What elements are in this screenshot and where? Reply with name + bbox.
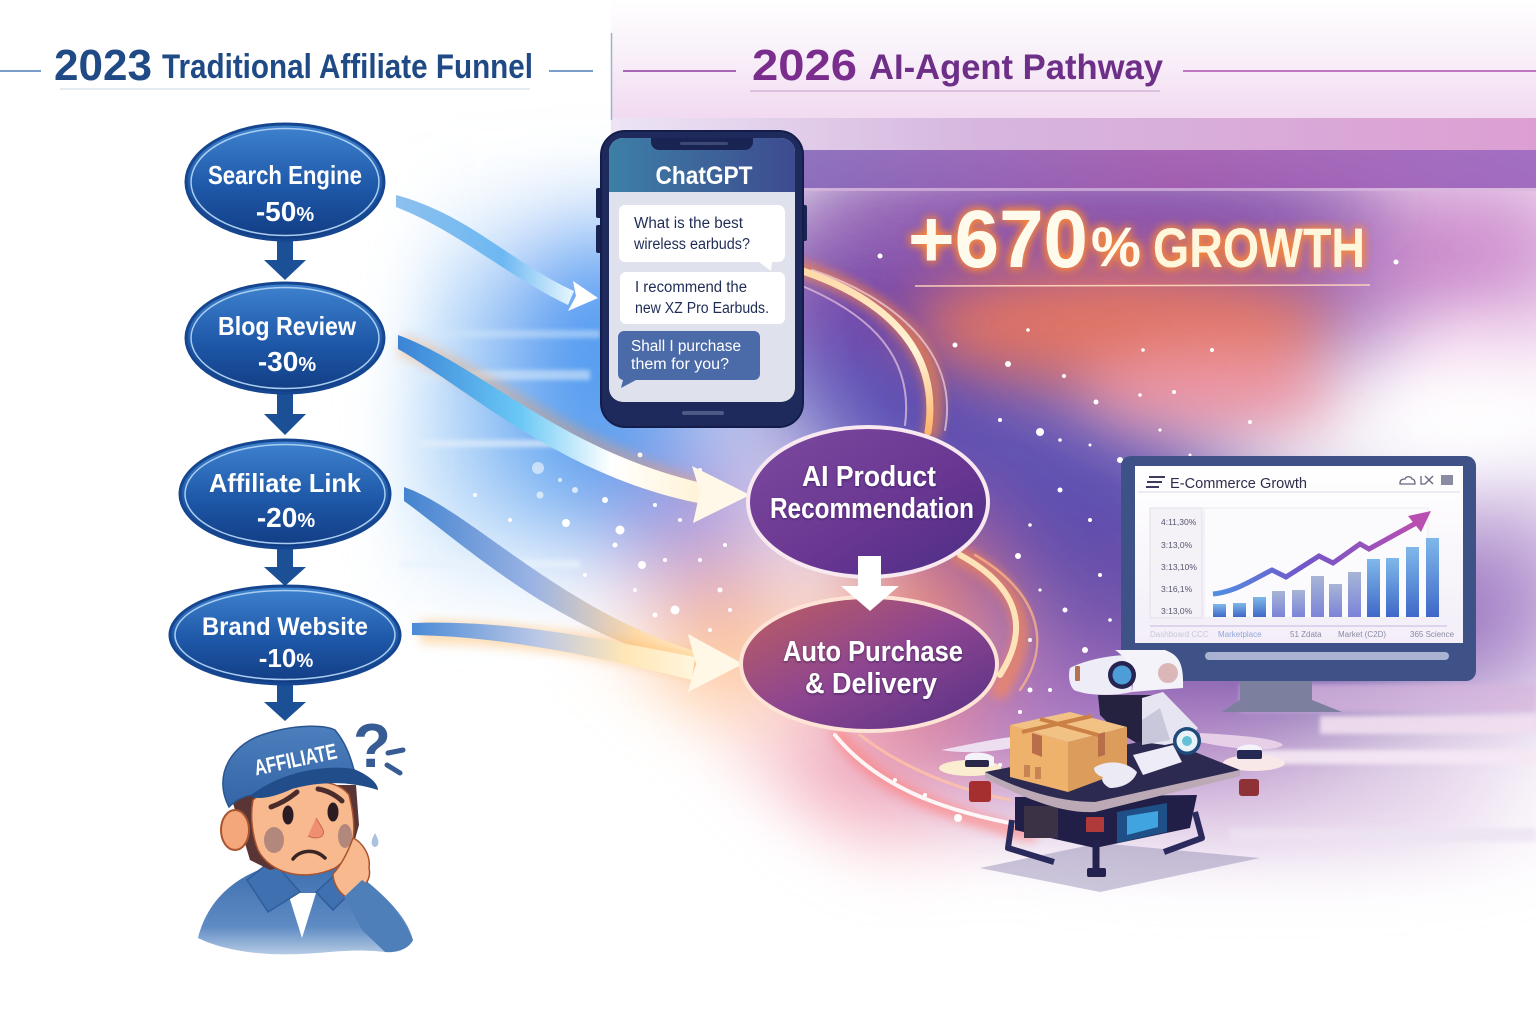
dashboard footer bbox=[1150, 630, 1455, 639]
funnel node: affiliate link: -20% bbox=[257, 502, 315, 533]
flow arrow: blog review to AI recommendation bbox=[398, 335, 750, 523]
y axis labels: 4:11,30% bbox=[1161, 517, 1197, 527]
y axis labels bbox=[1161, 517, 1197, 616]
funnel node: search engine: Search Engine bbox=[208, 160, 362, 190]
monitor with growth chart: E-Commerce Growth bbox=[1170, 475, 1307, 492]
y axis labels: 3:13,0% bbox=[1161, 606, 1193, 616]
sparkles bbox=[473, 254, 1398, 822]
chat bubble: question bbox=[619, 205, 785, 271]
node: auto purchase and delivery: Auto Purchase bbox=[783, 636, 963, 668]
ear bbox=[221, 810, 249, 850]
phone with chat bbox=[596, 131, 807, 427]
heading: 2023 traditional funnel: 2023 bbox=[54, 41, 152, 90]
chat bubble: recommendation bbox=[620, 272, 785, 324]
node: AI product recommendation: Recommendation bbox=[770, 493, 974, 525]
illustration: worried affiliate bbox=[198, 712, 413, 954]
chat bubble: purchase: them for you? bbox=[631, 356, 729, 373]
heading: 2026 AI-agent pathway bbox=[623, 41, 1536, 91]
drone lower body bbox=[1015, 795, 1197, 848]
chat bubble: recommendation: I recommend the bbox=[635, 279, 747, 296]
bars bbox=[1213, 538, 1439, 617]
illustration: worried affiliate: AFFILIATE bbox=[252, 738, 339, 780]
rotor wings bbox=[941, 737, 1012, 752]
drone delivery robot bbox=[939, 650, 1285, 892]
funnel node: brand website: Brand Website bbox=[202, 613, 368, 641]
chat bubble: recommendation: new XZ Pro Earbuds. bbox=[635, 300, 769, 317]
funnel node: search engine: -50% bbox=[256, 196, 314, 227]
node: AI product recommendation: AI Product bbox=[802, 461, 936, 493]
heading: 2023 traditional funnel: Traditional Affiliate Funnel bbox=[162, 48, 533, 86]
funnel step arrows bbox=[264, 240, 306, 721]
flow arrow: affiliate link to auto purchase bbox=[404, 487, 695, 664]
question mark: ? bbox=[353, 712, 391, 781]
robot arm bbox=[1133, 692, 1201, 775]
face bbox=[252, 781, 354, 875]
rotors and motors bbox=[969, 781, 991, 802]
hair bbox=[232, 785, 359, 870]
dashboard footer: Market (C2D) bbox=[1338, 630, 1386, 639]
big growth text bbox=[908, 194, 1370, 286]
arrow: AI recommendation to auto purchase bbox=[841, 556, 899, 611]
brows eyes mouth bbox=[271, 792, 297, 807]
funnel node: brand website bbox=[170, 586, 400, 684]
funnel node: blog review bbox=[186, 283, 384, 393]
center divider bbox=[610, 33, 612, 120]
parcel box bbox=[1010, 712, 1127, 792]
heading: 2026 AI-agent pathway: 2026 bbox=[752, 41, 857, 90]
legs bbox=[1008, 820, 1054, 862]
chat bubble: question: wireless earbuds? bbox=[633, 236, 750, 253]
y axis labels: 3:13,10% bbox=[1161, 562, 1197, 572]
funnel node: affiliate link bbox=[180, 440, 390, 548]
big growth text: % bbox=[1091, 215, 1141, 278]
big growth text: +670 bbox=[908, 194, 1088, 285]
chat bubble: question: What is the best bbox=[634, 215, 744, 232]
robot neck and torso bbox=[1098, 695, 1165, 760]
y axis labels: 3:16,1% bbox=[1161, 584, 1193, 594]
node: auto purchase and delivery: & Delivery bbox=[805, 668, 937, 700]
robot head bbox=[1069, 650, 1183, 695]
funnel node: affiliate link: Affiliate Link bbox=[209, 468, 362, 498]
funnel node: blog review: Blog Review bbox=[218, 311, 357, 341]
chat header: ChatGPT bbox=[656, 162, 752, 190]
flow arrow: brand website to auto purchase bbox=[412, 623, 743, 692]
platform bbox=[985, 738, 1240, 808]
node: auto purchase and delivery bbox=[741, 597, 997, 731]
dashboard footer: 51 Zdata bbox=[1290, 630, 1322, 639]
background: AI pathway glow bbox=[375, 30, 1536, 887]
dashboard footer: Marketplace bbox=[1218, 630, 1262, 639]
shirt bbox=[198, 862, 413, 954]
hat bbox=[223, 726, 354, 807]
funnel node: blog review: -30% bbox=[258, 346, 316, 377]
big growth text: GROWTH bbox=[1153, 216, 1365, 279]
chat bubble: purchase: Shall I purchase bbox=[631, 338, 741, 355]
chat bubble: purchase bbox=[618, 331, 760, 388]
glowing ribbons behind phone and nodes bbox=[800, 268, 1037, 835]
dashboard footer: Dashboard CCC bbox=[1150, 630, 1209, 639]
funnel node: brand website: -10% bbox=[259, 643, 313, 673]
flow arrow: search engine to phone bbox=[396, 195, 598, 311]
dashboard title bbox=[1146, 477, 1165, 487]
hand bbox=[333, 838, 370, 897]
robot hand bbox=[1094, 762, 1137, 788]
monitor with growth chart bbox=[1121, 456, 1476, 712]
growth line with arrow bbox=[1213, 511, 1431, 594]
heading: 2023 traditional funnel bbox=[0, 41, 593, 90]
node: AI product recommendation bbox=[748, 427, 988, 577]
funnel node: search engine bbox=[186, 124, 384, 240]
y axis labels: 3:13,0% bbox=[1161, 540, 1193, 550]
heading: 2026 AI-agent pathway: AI-Agent Pathway bbox=[869, 48, 1164, 87]
ground shadow bbox=[980, 843, 1260, 892]
dashboard footer: 365 Science bbox=[1410, 630, 1455, 639]
